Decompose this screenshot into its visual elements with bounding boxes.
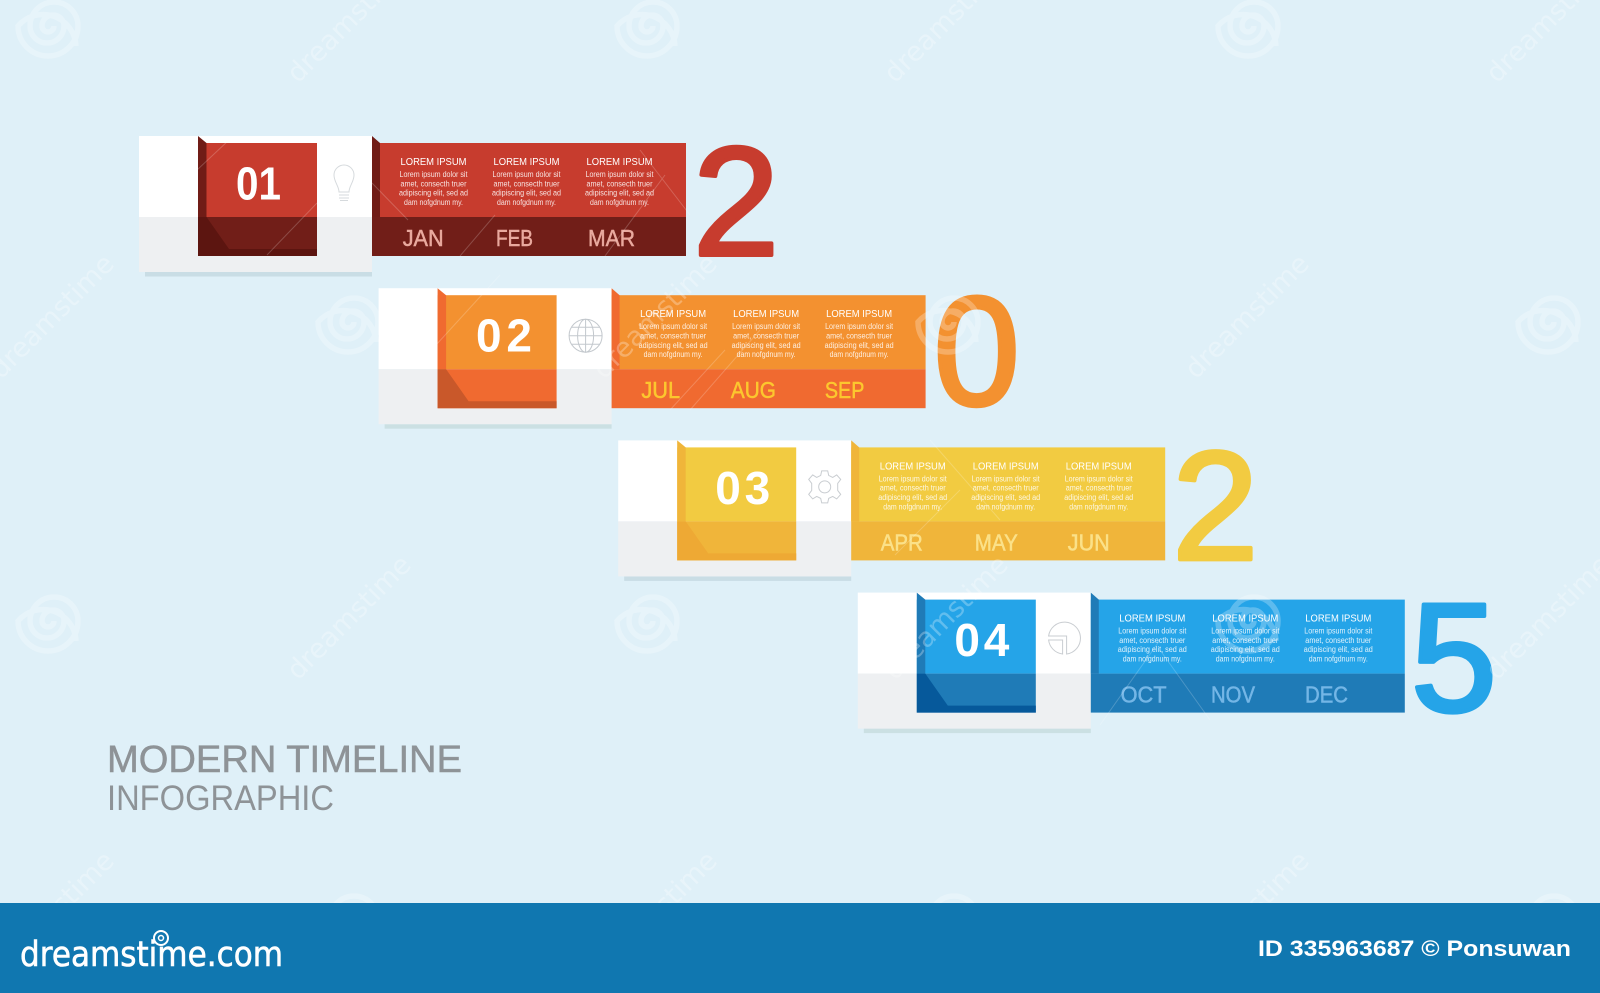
months bar 4: dam nofgdnum my. [1309, 654, 1368, 664]
months bar 1: LOREM IPSUM [400, 156, 466, 168]
icon: gear [809, 471, 841, 503]
months bar 2: Lorem ipsum dolor sit [732, 322, 801, 331]
months bar 2: LOREM IPSUM [733, 308, 799, 320]
months bar 2: adipiscing elit, sed ad [825, 341, 894, 350]
months bar 2 [612, 288, 926, 408]
months bar 3: Lorem ipsum dolor sit [972, 474, 1040, 483]
footer logo: dreamstime.com [20, 935, 283, 975]
footer band [0, 903, 1600, 993]
months bar 3: Lorem ipsum dolor sit [1065, 474, 1133, 483]
months bar 3: APR [881, 529, 923, 555]
months bar 4: adipiscing elit, sed ad [1118, 645, 1187, 654]
months bar 4: Lorem ipsum dolor sit [1118, 627, 1187, 636]
months bar 3: amet, consecth truer [1066, 484, 1132, 493]
icon: globe [569, 319, 602, 352]
months bar 4: amet, consecth truer [1305, 636, 1372, 645]
months bar 1: dam nofgdnum my. [590, 198, 649, 207]
panel: step 01 [139, 115, 779, 288]
icon: pie chart [1049, 622, 1080, 654]
watermark overlay: dreamstime [587, 845, 724, 982]
months bar 1: amet, consecth truer [586, 179, 653, 188]
months bar 4: LOREM IPSUM [1212, 613, 1278, 625]
year digit 5: 5 [1411, 571, 1497, 744]
months bar 1: dam nofgdnum my. [404, 198, 463, 207]
months bar 3: dam nofgdnum my. [883, 502, 942, 511]
months bar 2: adipiscing elit, sed ad [732, 341, 801, 350]
months bar 4: NOV [1211, 682, 1256, 708]
months bar 2: JUL [641, 377, 680, 403]
number tab 03: 03 [715, 462, 770, 514]
months bar 3 [851, 440, 1165, 560]
months bar 4: dam nofgdnum my. [1123, 654, 1182, 664]
months bar 1: adipiscing elit, sed ad [492, 189, 561, 198]
panel: step 03 [618, 419, 1258, 592]
title [107, 739, 462, 818]
number tab 03 [677, 440, 796, 560]
months bar 1: MAR [588, 225, 635, 251]
number tab 02 [438, 288, 557, 408]
number tab 04: 04 [954, 614, 1010, 666]
months bar 1: Lorem ipsum dolor sit [400, 170, 468, 179]
months bar 3: JUN [1068, 529, 1110, 555]
months bar 1: adipiscing elit, sed ad [585, 189, 654, 198]
months bar 1: LOREM IPSUM [494, 156, 560, 168]
months bar 3: LOREM IPSUM [880, 460, 946, 472]
months bar 1: JAN [403, 225, 444, 251]
months bar 1: adipiscing elit, sed ad [399, 189, 468, 198]
months bar 2: LOREM IPSUM [826, 308, 892, 320]
months bar 1: amet, consecth truer [400, 179, 467, 188]
title: MODERN TIMELINE [107, 739, 462, 781]
panel: step 02 [379, 265, 1020, 438]
months bar 4: dam nofgdnum my. [1216, 654, 1275, 664]
months bar 1: Lorem ipsum dolor sit [492, 170, 561, 179]
title: INFOGRAPHIC [107, 779, 334, 818]
months bar 3: LOREM IPSUM [1066, 460, 1132, 472]
months bar 4: adipiscing elit, sed ad [1211, 645, 1280, 654]
months bar 2: Lorem ipsum dolor sit [639, 322, 708, 331]
months bar 4: Lorem ipsum dolor sit [1304, 627, 1373, 636]
number tab 02: 02 [476, 310, 532, 362]
watermark overlay: dreamstime [281, 549, 418, 686]
months bar 3: MAY [975, 529, 1018, 555]
watermark overlay: dreamstime [587, 248, 724, 385]
months bar 3: amet, consecth truer [973, 484, 1039, 493]
months bar 4: LOREM IPSUM [1305, 613, 1371, 625]
months bar 4: OCT [1121, 682, 1167, 708]
months bar 1: amet, consecth truer [494, 179, 560, 188]
months bar 2: LOREM IPSUM [640, 308, 706, 320]
months bar 4: Lorem ipsum dolor sit [1211, 627, 1280, 636]
months bar 2: amet, consecth truer [826, 332, 892, 340]
months bar 2: SEP [825, 377, 864, 403]
number tab 01 [198, 136, 317, 256]
months bar 1: dam nofgdnum my. [497, 198, 556, 207]
months bar 2: amet, consecth truer [640, 332, 706, 340]
icon: light bulb [334, 165, 354, 200]
months bar 2: Lorem ipsum dolor sit [825, 322, 894, 331]
year digit 2: 2 [693, 115, 779, 288]
months bar 3: dam nofgdnum my. [976, 502, 1035, 511]
panel: step 04 [858, 571, 1497, 744]
year digit 0: 0 [934, 265, 1020, 438]
months bar 2: AUG [731, 377, 776, 403]
watermark overlay: dreamstime [1179, 845, 1316, 982]
months bar 3: adipiscing elit, sed ad [971, 493, 1040, 502]
watermark overlay: dreamstime [878, 549, 1015, 686]
months bar 4: LOREM IPSUM [1119, 613, 1185, 625]
number tab 01: 01 [236, 158, 281, 210]
months bar 3: Lorem ipsum dolor sit [879, 474, 947, 483]
months bar 1: LOREM IPSUM [586, 156, 652, 168]
months bar 4: amet, consecth truer [1119, 636, 1186, 645]
months bar 2: amet, consecth truer [733, 332, 799, 340]
months bar 3: dam nofgdnum my. [1069, 502, 1128, 511]
months bar 3: LOREM IPSUM [973, 460, 1039, 472]
months bar 1 [372, 136, 686, 256]
months bar 4: adipiscing elit, sed ad [1304, 645, 1373, 654]
months bar 3: amet, consecth truer [880, 484, 946, 493]
year digit 2: 2 [1172, 419, 1258, 592]
months bar 4: DEC [1305, 682, 1348, 708]
months bar 3: adipiscing elit, sed ad [1064, 493, 1133, 502]
number tab 04 [917, 593, 1036, 713]
months bar 3: adipiscing elit, sed ad [878, 493, 947, 502]
months bar 2: adipiscing elit, sed ad [639, 341, 708, 350]
months bar 1: Lorem ipsum dolor sit [586, 170, 654, 179]
watermark overlay: dreamstime [1179, 248, 1316, 385]
months bar 4 [1091, 593, 1405, 713]
months bar 2: dam nofgdnum my. [737, 350, 796, 359]
months bar 4: amet, consecth truer [1212, 636, 1279, 645]
footer credit: ID 335963687 © Ponsuwan [1258, 936, 1571, 961]
months bar 1: FEB [496, 225, 533, 251]
months bar 2: dam nofgdnum my. [644, 350, 703, 359]
months bar 2: dam nofgdnum my. [830, 350, 889, 359]
